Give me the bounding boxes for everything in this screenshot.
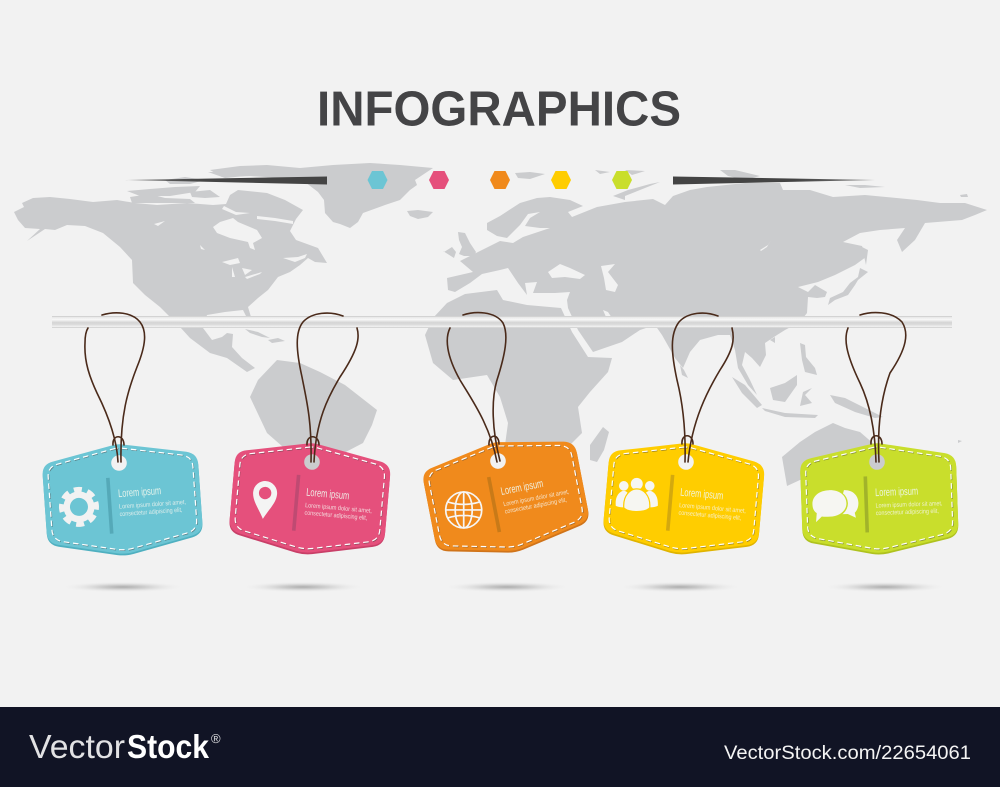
string bbox=[85, 313, 145, 462]
icon: people bbox=[616, 478, 658, 512]
hexagon: pink bbox=[429, 171, 449, 189]
text block: consectetur adipiscing elit, bbox=[678, 510, 742, 522]
icon: gear bbox=[60, 488, 98, 526]
icon: map pin bbox=[251, 480, 278, 520]
panel: yellow tag bbox=[601, 313, 766, 561]
world map bbox=[14, 163, 987, 486]
text block: Lorem ipsum dolor sit amet, bbox=[503, 489, 570, 508]
text block: consectetur adipiscing elit, bbox=[876, 508, 939, 517]
footer logo bbox=[29, 729, 221, 766]
text block: Lorem ipsum bbox=[680, 487, 724, 502]
text block: Lorem ipsum dolor sit amet, bbox=[875, 500, 943, 510]
text block: Lorem ipsum dolor sit amet, bbox=[119, 499, 186, 511]
divider bbox=[666, 475, 674, 531]
text block: consectetur adipiscing elit, bbox=[304, 510, 368, 522]
text block: Lorem ipsum dolor sit amet, bbox=[305, 502, 372, 515]
text block: Lorem ipsum bbox=[306, 487, 350, 502]
string bbox=[672, 313, 733, 462]
title: INFOGRAPHICS bbox=[317, 83, 681, 137]
divider bbox=[863, 476, 869, 532]
footer logo: Stock bbox=[127, 729, 209, 766]
text block: Lorem ipsum bbox=[118, 485, 161, 500]
footer id: VectorStock.com/22654061 bbox=[724, 743, 971, 764]
divider bbox=[292, 475, 300, 531]
string bbox=[447, 313, 506, 462]
ground shadows bbox=[61, 582, 947, 592]
icon: chat bubbles bbox=[810, 488, 859, 522]
hexagon: green bbox=[612, 171, 632, 189]
divider bbox=[487, 477, 501, 532]
divider bbox=[106, 478, 114, 534]
rail bbox=[52, 316, 952, 328]
hexagon: blue bbox=[368, 171, 388, 189]
string bbox=[846, 313, 906, 462]
text block: Lorem ipsum dolor sit amet, bbox=[679, 502, 746, 515]
icon: globe bbox=[446, 492, 482, 528]
hexagon row bbox=[368, 171, 632, 189]
left wedge bbox=[125, 176, 327, 184]
panel: green tag bbox=[799, 313, 959, 557]
text block bbox=[118, 483, 187, 518]
panel: pink tag bbox=[227, 313, 392, 561]
right wedge bbox=[673, 176, 875, 184]
hexagon: yellow bbox=[551, 171, 571, 189]
footer logo: ® bbox=[211, 731, 221, 746]
text block: consectetur adipiscing elit, bbox=[504, 497, 568, 516]
text block: consectetur adipiscing elit, bbox=[119, 507, 183, 518]
footer logo: Vector bbox=[29, 729, 125, 766]
text block: Lorem ipsum bbox=[500, 478, 544, 498]
panel: orange tag bbox=[419, 313, 593, 567]
text block bbox=[304, 487, 374, 522]
panel: blue tag bbox=[41, 313, 204, 561]
text block bbox=[678, 487, 748, 522]
text block bbox=[875, 485, 943, 517]
string bbox=[297, 313, 358, 462]
text block bbox=[500, 473, 571, 516]
hexagon: orange bbox=[490, 171, 510, 189]
footer bar bbox=[0, 707, 1000, 787]
map inland seas bbox=[154, 206, 771, 318]
text block: Lorem ipsum bbox=[875, 486, 918, 499]
